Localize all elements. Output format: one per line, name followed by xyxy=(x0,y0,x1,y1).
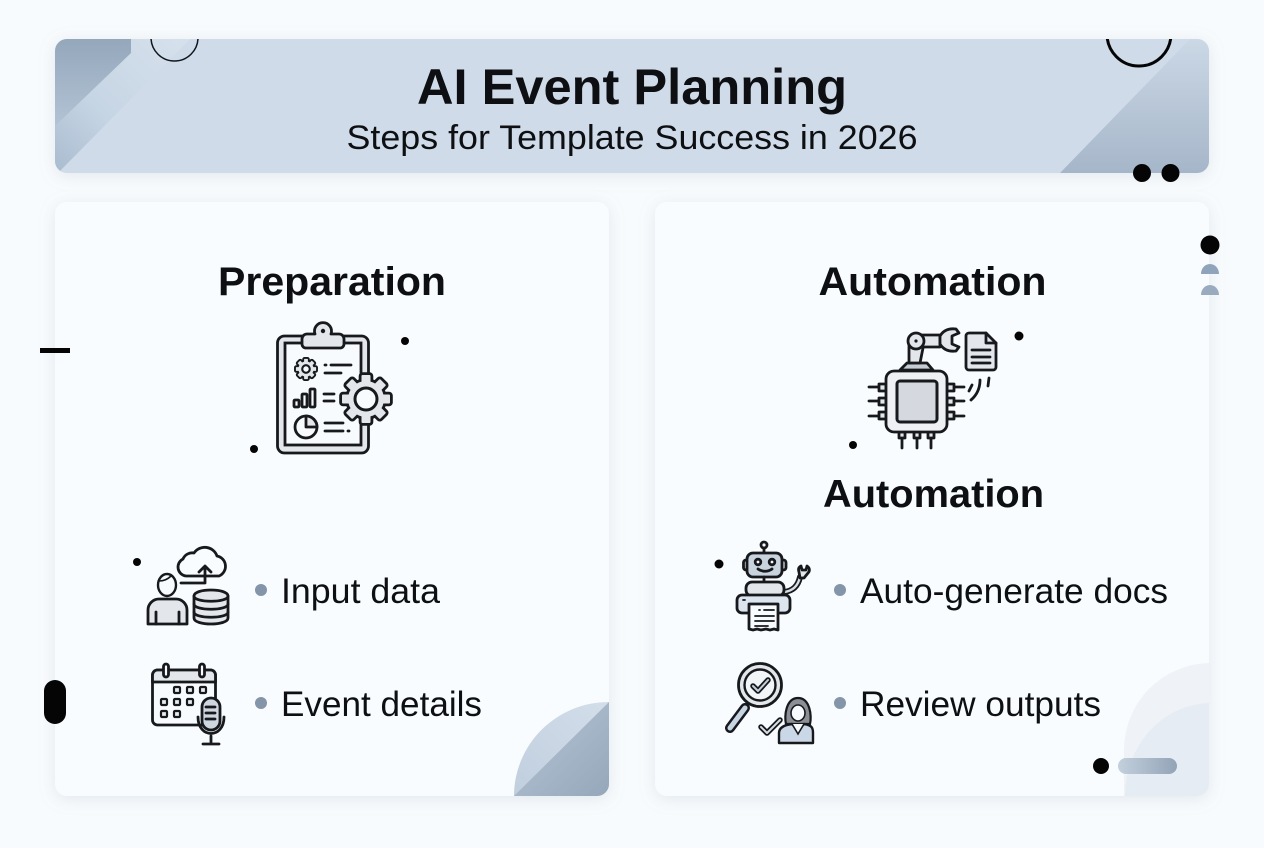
subtitle: Steps for Template Success in 2026 xyxy=(346,119,918,157)
icon: clipboard with gear xyxy=(278,323,390,453)
item: input data xyxy=(148,547,441,624)
header banner xyxy=(52,39,1212,178)
bullet xyxy=(255,697,267,709)
decorative dot and pill, bottom right xyxy=(1093,758,1177,774)
item: event details xyxy=(152,664,482,744)
panel corner decoration xyxy=(514,702,609,796)
heading: preparation: Preparation xyxy=(218,260,446,304)
panel: preparation xyxy=(55,202,609,796)
header corner dots xyxy=(1133,164,1180,182)
item: review outputs xyxy=(730,664,1101,743)
decorative dots xyxy=(714,332,1024,568)
icon: chip with robot arm and document xyxy=(869,329,996,448)
decorative pill, left edge xyxy=(44,680,66,724)
heading: automation: Automation xyxy=(818,260,1046,304)
panel corner decoration xyxy=(1124,663,1209,796)
decorative dash, left edge xyxy=(40,348,70,353)
label: event details: Event details xyxy=(281,685,482,724)
label: auto-generate docs: Auto-generate docs xyxy=(860,572,1168,611)
bullet xyxy=(834,584,846,596)
label: review outputs: Review outputs xyxy=(860,685,1101,724)
icon: magnifier with check and reviewer xyxy=(730,664,813,743)
panel: automation xyxy=(655,202,1209,796)
bullet xyxy=(834,697,846,709)
icon: robot printing document xyxy=(737,542,809,630)
icon: person, cloud and database xyxy=(148,547,228,624)
decorative dot and half circles, right edge xyxy=(1200,236,1220,295)
icon: calendar and microphone xyxy=(152,664,224,744)
item: auto-generate docs xyxy=(737,542,1168,630)
decorative dots xyxy=(133,337,409,566)
title: AI Event Planning xyxy=(417,59,847,115)
bullet xyxy=(255,584,267,596)
subheading: automation: Automation xyxy=(823,473,1044,516)
label: input data: Input data xyxy=(281,572,441,611)
